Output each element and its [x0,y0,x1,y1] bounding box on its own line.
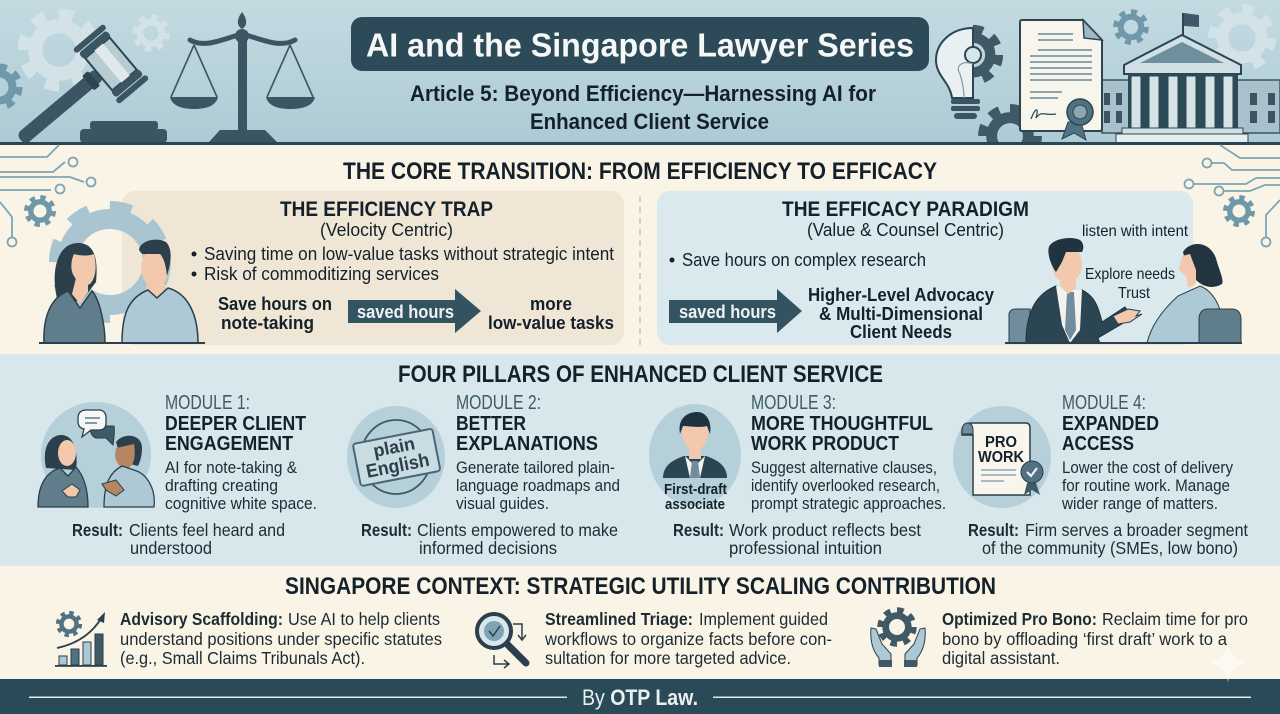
module title [1062,412,1159,455]
section heading: Singapore context: SINGAPORE CONTEXT: STRATEGIC UTILITY SCALING CONTRIBUTION [285,573,996,600]
module result: Result: [673,520,724,540]
circuit decoration left [0,145,96,246]
bullets: Saving time on low-value tasks without strategic intent [204,244,614,264]
module title [456,412,598,455]
section heading: four pillars: FOUR PILLARS OF ENHANCED CLIENT SERVICE [398,361,883,388]
module result: Work product reflects best [729,520,921,540]
subtitle: Article 5: Beyond Efficiency—Harnessing AI for [410,81,876,106]
pillar: module 3 [649,392,946,558]
flow: save hours on note-taking [218,293,332,333]
divider [639,196,641,345]
module description: Lower the cost of delivery [1062,458,1233,477]
context text: sultation for more targeted advice. [545,648,791,668]
module result: of the community (SMEs, low bono) [982,538,1238,558]
section background: core transition [0,145,1280,354]
dialogue labels [1082,223,1189,302]
module result: Result: [72,520,123,540]
pillar: module 2 [347,392,620,558]
module result: Clients empowered to make [417,520,618,540]
figure: client [1147,244,1241,343]
module title: ENGAGEMENT [165,432,293,455]
module result: professional intuition [729,538,882,558]
module description: wider range of matters. [1061,494,1218,513]
section heading: core transition: THE CORE TRANSITION: FROM EFFICIENCY TO EFFICACY [343,158,937,185]
module title: WORK PRODUCT [751,432,899,455]
arrow: saved hours [669,289,802,333]
flow: higher-level advocacy [808,284,995,342]
header band [0,0,1280,145]
context text [544,609,832,668]
module description [456,458,620,513]
context text [942,609,1248,668]
arrow: saved hours [348,289,481,333]
subtitle [410,81,876,134]
panel heading: THE EFFICIENCY TRAP [280,198,493,221]
icon: small gear left [27,198,53,224]
module result [361,520,618,558]
module description: for routine work. Manage [1062,476,1230,495]
icon: magnifier [477,614,526,668]
icon: gear and growth chart [55,612,107,667]
module description: prompt strategic approaches. [751,494,946,513]
context text [120,609,442,668]
context text: Implement guided [699,609,828,629]
icon caption: First-draft [664,482,727,498]
section background: four pillars [0,354,1280,566]
panel subheading: (Value & Counsel Centric) [807,220,1004,240]
pillar: module 1 [38,392,317,558]
context text: Streamlined Triage: [545,609,693,629]
module description [1061,458,1233,513]
icon: sound block [80,121,167,143]
sparkle mark [1208,644,1248,683]
illustration: two people and gear [39,206,205,344]
module description: Suggest alternative clauses, [751,458,937,477]
arrow: saved hours: saved hours [357,301,454,322]
icon: first-draft associate [649,404,741,506]
context item: advisory scaffolding [55,609,442,668]
dialogue labels: Trust [1118,285,1150,302]
figure: man [122,240,198,343]
footer band [0,679,1280,714]
section background: Singapore context [0,566,1280,679]
module result [72,520,285,558]
module description [165,458,317,513]
icon: signed document [1020,20,1102,140]
context text: understand positions under specific statutes [120,629,442,649]
module title [165,412,306,455]
title pill: AI and the Singapore Lawyer Series [366,26,914,64]
illustration: lawyer and client [1005,238,1242,344]
context item: streamlined triage [477,609,832,668]
module title: EXPLANATIONS [456,432,598,455]
module title: BETTER [456,412,526,435]
module label: MODULE 1: [165,392,250,414]
dialogue labels: listen with intent [1082,223,1189,240]
flow: more low-value tasks [488,293,614,333]
icon: scales of justice [170,12,315,143]
module description: AI for note-taking & [165,458,298,477]
module description [751,458,946,513]
bullets [192,244,614,284]
icon caption [664,482,727,513]
module result: informed decisions [419,538,557,558]
context text: bono by offloading ‘first draft’ work to a [942,629,1227,649]
flow: more low-value tasks: low-value tasks [488,312,614,333]
pillar: module 4 [953,392,1248,558]
module description: Generate tailored plain- [456,458,615,477]
icon: pro work document [953,406,1051,508]
context item: optimized pro bono [871,609,1248,668]
module title: EXPANDED [1062,412,1159,435]
module description: cognitive white space. [165,494,317,513]
module description: identify overlooked research, [751,476,940,495]
flow: higher-level advocacy: Higher-Level Advocacy [808,284,995,305]
icon: courthouse portico [1116,13,1248,143]
module result: Firm serves a broader segment [1025,520,1248,540]
module result [968,520,1248,558]
icon: gavel [18,24,148,142]
module title: DEEPER CLIENT [165,412,306,435]
context text: Use AI to help clients [288,609,440,629]
dialogue labels: Explore needs [1085,266,1175,283]
flow: save hours on note-taking: Save hours on [218,293,332,314]
context text: Advisory Scaffolding: [120,609,283,629]
icon: lightbulb with gear [936,28,998,119]
module label: MODULE 3: [751,392,836,414]
module description: language roadmaps and [456,476,620,495]
module label: MODULE 4: [1062,392,1146,414]
bullet: Save hours on complex research [682,250,926,270]
module description: visual guides. [456,494,549,513]
context text: workflows to organize facts before con- [544,629,832,649]
arrow: saved hours: saved hours [679,301,776,322]
module description: drafting creating [165,476,278,495]
figure: lawyer [1009,238,1142,343]
module title: MORE THOUGHTFUL [751,412,933,435]
circuit decoration right [1184,145,1280,246]
panel: the efficiency trap [122,191,624,345]
icon: two people talking [38,402,154,508]
panel: the efficacy paradigm [657,191,1193,345]
module result: Result: [968,520,1019,540]
icon: plain English stamp [347,406,445,508]
icon caption: associate [665,497,725,513]
icon: small gear right [1226,198,1252,224]
module label: MODULE 2: [456,392,541,414]
module result: understood [130,538,212,558]
context text: Optimized Pro Bono: [942,609,1097,629]
module result [673,520,921,558]
icon: plain English stamp: plain [372,433,417,461]
panel heading: THE EFFICACY PARADIGM [782,198,1029,221]
flow: more low-value tasks: more [530,293,572,314]
bullets: Risk of commoditizing services [204,264,439,284]
header illustration: gears, gavel and scales [0,8,315,142]
module result: Result: [361,520,412,540]
icon: pro work document: PRO [985,434,1017,451]
header illustration: lightbulb, document and courthouse [936,10,1280,163]
panel subheading: (Velocity Centric) [320,220,453,240]
subtitle: Enhanced Client Service [530,109,769,134]
context text: (e.g., Small Claims Tribunals Act). [120,648,365,668]
title pill [351,17,929,71]
icon: plain English stamp: English [364,450,431,483]
flow: higher-level advocacy: Client Needs [850,321,952,342]
context text: Reclaim time for pro [1102,609,1248,629]
module title: ACCESS [1062,432,1134,455]
icon: pro work document: WORK [978,449,1025,466]
figure: woman [44,243,105,343]
module result: Clients feel heard and [129,520,285,540]
footer credit: By OTP Law. [582,685,698,710]
flow: save hours on note-taking: note-taking [221,312,314,333]
icon: gear in hands [871,611,925,667]
flow: higher-level advocacy: & Multi-Dimensional [819,303,983,324]
context text: digital assistant. [942,648,1060,668]
module title [751,412,933,455]
icon: wings of courthouse [1102,80,1280,133]
